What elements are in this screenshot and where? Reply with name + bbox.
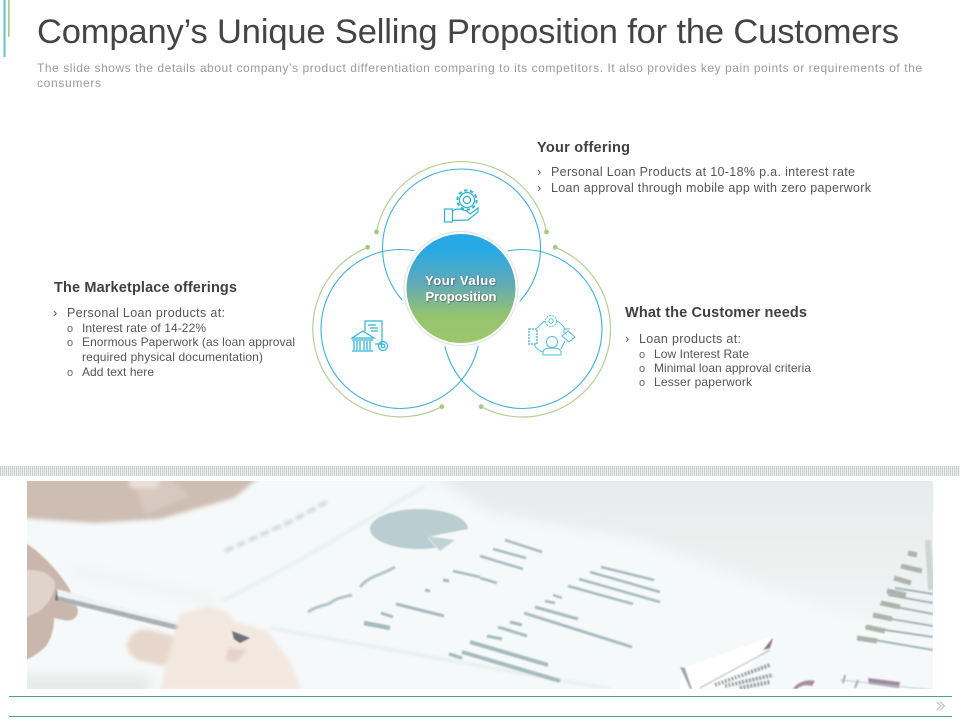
center circle: your value proposition <box>401 228 521 348</box>
top report text <box>225 500 330 551</box>
chart bars <box>364 540 660 681</box>
center circle: your value proposition: Proposition <box>426 289 497 304</box>
right edge chart <box>857 540 933 650</box>
desk background <box>20 470 945 695</box>
paper edges <box>222 486 610 689</box>
text block: customer needs: Low Interest Rate <box>654 347 749 361</box>
arc end dots <box>365 230 558 409</box>
right hand <box>127 606 302 690</box>
icon: customer with needs <box>529 316 575 355</box>
text block: marketplace offerings: Add text here <box>82 365 154 379</box>
photo: hands with pen over financial charts <box>20 470 945 695</box>
small line charts <box>308 567 395 612</box>
venn diagram <box>313 162 611 417</box>
blue circles <box>321 169 602 408</box>
text block: your offering: Your offering <box>537 140 630 156</box>
text block: your offering <box>537 140 872 195</box>
text block: marketplace offerings: Enormous Paperwork (as loan approval <box>82 335 295 349</box>
text block: marketplace offerings: required physical documentation) <box>82 350 263 364</box>
accent bars <box>4 0 10 57</box>
description text <box>37 61 922 90</box>
stripe band <box>0 466 960 476</box>
text block: customer needs: o <box>639 349 645 361</box>
text block: customer needs: Loan products at: <box>639 332 741 346</box>
description text: The slide shows the details about company’s product differentiation comparing to its competitors. It also provides key pain points or requirements of the <box>37 61 922 75</box>
center circle: your value proposition: Your Value <box>425 273 496 288</box>
text block: your offering: › <box>537 165 541 179</box>
pen <box>55 589 186 630</box>
text block: marketplace offerings: Interest rate of 14-22% <box>82 321 206 335</box>
text block: marketplace offerings: › <box>53 306 57 320</box>
text block: customer needs: o <box>639 363 645 375</box>
text block: customer needs: What the Customer needs <box>625 305 807 321</box>
outer green arcs <box>313 162 611 417</box>
description text: consumers <box>37 76 101 90</box>
text block: marketplace offerings: Personal Loan products at: <box>67 306 225 320</box>
text block: your offering: Personal Loan Products at 10-18% p.a. interest rate <box>551 165 855 179</box>
icon: hand with gear <box>444 190 478 222</box>
text block: marketplace offerings <box>53 280 295 379</box>
icon: bank with document <box>352 321 388 351</box>
text block: marketplace offerings: o <box>67 367 73 379</box>
footer lines <box>9 696 952 716</box>
text block: marketplace offerings: o <box>67 323 73 335</box>
text block: your offering: › <box>537 181 541 195</box>
text block: customer needs: Minimal loan approval criteria <box>654 361 811 375</box>
title: Company’s Unique Selling Proposition for the Customers <box>37 13 899 51</box>
text block: customer needs <box>625 305 811 389</box>
footer chevrons <box>937 702 944 710</box>
text block: your offering: Loan approval through mobile app with zero paperwork <box>551 181 872 195</box>
hand shadow and pen tip <box>226 631 250 662</box>
text block: customer needs: Lesser paperwork <box>654 375 753 389</box>
left hand <box>27 543 79 660</box>
text block: customer needs: › <box>625 332 629 346</box>
text block: customer needs: o <box>639 377 645 389</box>
pie chart <box>370 509 468 552</box>
text block: marketplace offerings: The Marketplace offerings <box>54 280 237 296</box>
folded paper and dark accents <box>680 636 933 690</box>
text block: marketplace offerings: o <box>67 337 73 349</box>
blurred hand at top <box>27 481 258 526</box>
